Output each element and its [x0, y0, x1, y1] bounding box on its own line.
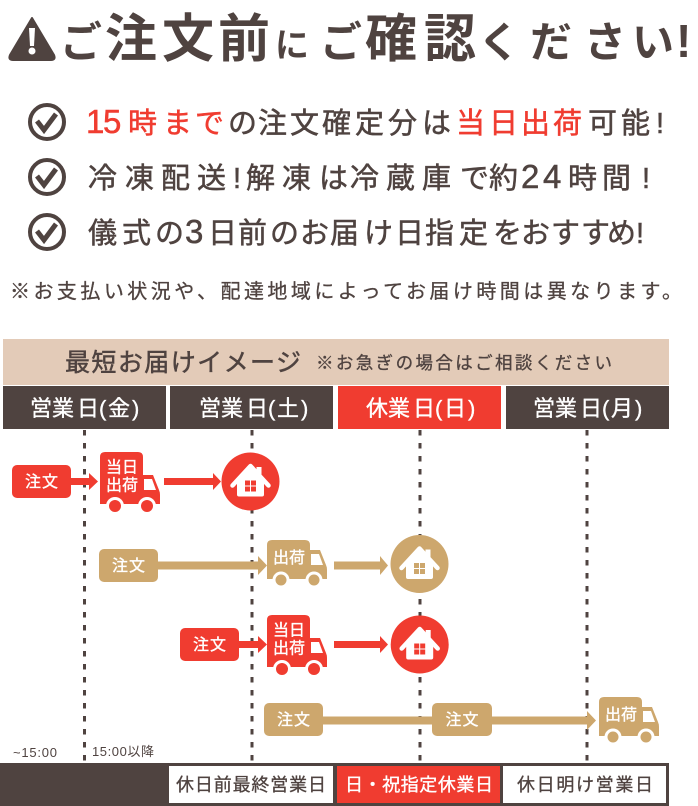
legend bar [0, 763, 669, 806]
point 3: 3 [185, 213, 203, 250]
point 1: 時まで [128, 107, 224, 140]
icon: check 1 [30, 105, 64, 139]
truck [599, 697, 659, 746]
house [390, 535, 448, 593]
point 2: 冷凍配送!解凍は冷蔵庫で約 [88, 162, 518, 195]
truck [267, 615, 327, 678]
point 1: 可能! [588, 107, 664, 140]
truck [100, 452, 160, 515]
legend: first business day: 休日明け営業日 [517, 775, 653, 795]
point 2: 24 [521, 158, 561, 195]
truck: 出荷 [106, 476, 138, 494]
flow 1: red, order before 15:00: 注文 [25, 473, 58, 491]
legend: designated holiday: 日・祝指定休業日 [345, 775, 493, 795]
icon: check 2 [30, 160, 64, 194]
warning icon [9, 18, 55, 60]
heading: 最短お届けイメージ [65, 349, 301, 377]
flow 3: red, order on last business day [180, 615, 449, 678]
flow 4: tan, order over the holiday: 注文 [277, 711, 310, 729]
title: ご [60, 19, 102, 66]
title: ください [478, 19, 674, 66]
truck: 当日 [106, 458, 138, 476]
day column headers: 営業日(月) [533, 396, 642, 421]
timeline heading band [3, 339, 669, 385]
flow 4: tan, order over the holiday: 注文 [446, 711, 479, 729]
title: 注文前 [105, 11, 270, 69]
time label: until 15:00: ~15:00 [13, 745, 57, 760]
checklist [30, 103, 664, 250]
point 1: 15 [86, 103, 121, 140]
point 2: 時間! [568, 162, 650, 195]
flow 2: tan, order after 15:00: 注文 [112, 557, 145, 575]
house [222, 452, 280, 510]
icon: check 3 [30, 215, 64, 249]
truck: 出荷 [605, 706, 637, 724]
point 1: の注文確定分は [228, 107, 451, 140]
truck: 出荷 [273, 640, 305, 658]
day column headers: 営業日(土) [199, 396, 308, 421]
panel: delivery timeline [0, 339, 669, 806]
flow 3: red, order on last business day: 注文 [193, 636, 226, 654]
title: ご [320, 19, 362, 66]
truck: 出荷 [273, 549, 305, 567]
legend: designated holiday [337, 766, 500, 803]
heading note: ※お急ぎの場合はご相談ください [316, 353, 612, 373]
title: に [275, 27, 309, 65]
note: ※お支払い状況や、配達地域によってお届け時間は異なります。 [10, 280, 682, 303]
flow 1: red, order before 15:00 [12, 452, 280, 515]
day column headers [3, 386, 669, 429]
legend: last business day: 休日前最終営業日 [176, 775, 326, 795]
flow 4: tan, order over the holiday [264, 697, 659, 746]
time label: after 15:00: 15:00以降 [92, 744, 154, 759]
point 1: 当日出荷 [456, 107, 582, 140]
point 3: 儀式の [88, 217, 184, 250]
legend: first business day [503, 766, 666, 803]
title: 確認 [365, 11, 476, 69]
house [391, 616, 449, 674]
truck [267, 540, 327, 588]
day column headers: 休業日(日) [366, 396, 475, 421]
day column headers: 営業日(金) [30, 396, 139, 421]
truck: 当日 [273, 622, 305, 640]
legend: last business day [169, 766, 333, 803]
point 3: 日前のお届け日指定をおすすめ! [208, 217, 644, 250]
flow 2: tan, order after 15:00 [99, 535, 448, 593]
title: ! [676, 15, 691, 67]
